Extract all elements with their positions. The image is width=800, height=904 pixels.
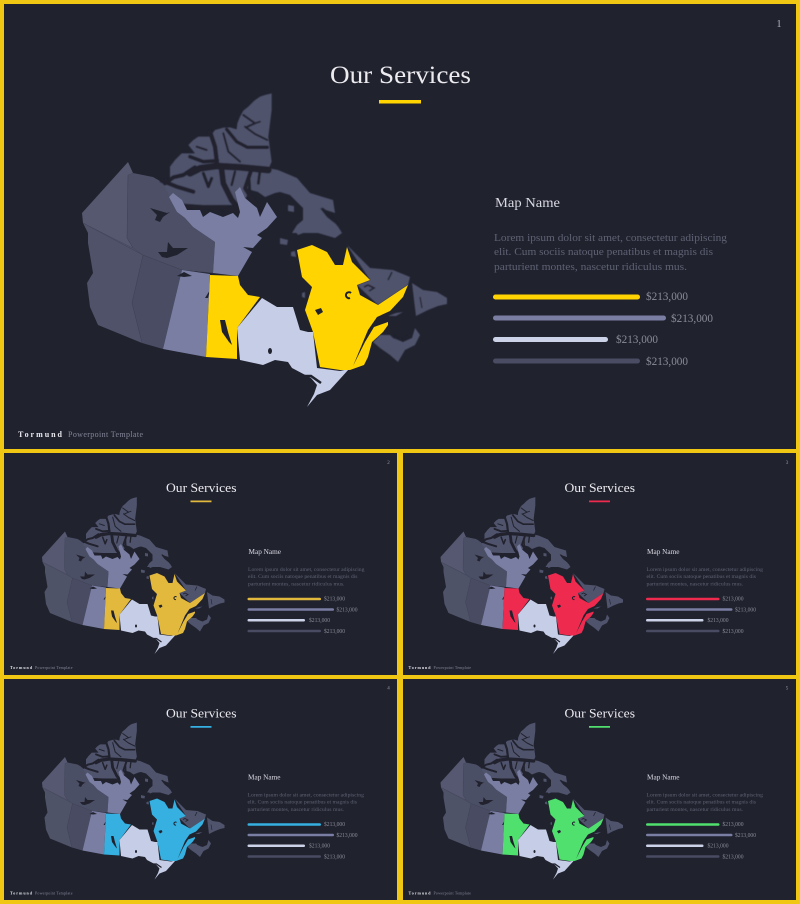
slide 5 contents: Powerpoint Template <box>434 890 471 896</box>
slide 4 contents: elit. Cum sociis natoque penatibus et magnis dis <box>248 800 357 806</box>
slide 2 contents: 2 <box>387 461 390 466</box>
slide 2 contents: $213,000 <box>336 606 358 614</box>
body text <box>494 232 728 273</box>
bar chart <box>493 290 713 368</box>
slide 3 contents: $213,000 <box>722 628 744 635</box>
slide 2 contents: parturient montes, nascetur ridiculus mus. <box>248 582 345 588</box>
slide 4 contents: $213,000 <box>324 854 345 860</box>
title: Our Services <box>330 62 471 89</box>
slide 5 contents: Tormund <box>408 890 431 896</box>
slide 4 contents: Tormund <box>10 890 33 896</box>
body text: elit. Cum sociis natoque penatibus et magnis dis <box>494 246 713 258</box>
slide 3 contents: $213,000 <box>708 617 729 624</box>
slide 4 contents <box>10 686 390 896</box>
slide 3 contents: Map Name <box>647 548 680 556</box>
slide 4 contents: parturient montes, nascetur ridiculus mus. <box>248 807 345 813</box>
footer: Tormund <box>18 430 63 439</box>
slide 2 contents: $213,000 <box>309 617 330 624</box>
bar chart: $213,000 <box>646 290 688 303</box>
bar chart: $213,000 <box>671 312 713 325</box>
panel: slide 2 yellow <box>4 453 397 675</box>
slide 3 contents: elit. Cum sociis natoque penatibus et magnis dis <box>646 574 756 580</box>
title underline <box>379 100 421 104</box>
slide 5 contents: $213,000 <box>722 854 744 860</box>
slide 3 contents: 3 <box>786 461 789 466</box>
panel: slide 5 green <box>403 679 796 900</box>
slide 2 contents: Tormund <box>10 665 33 670</box>
slide 4 contents: Lorem ipsum dolor sit amet, consectetur adipiscing <box>248 792 364 798</box>
slide 3 contents: $213,000 <box>735 606 756 614</box>
slide 2 contents: $213,000 <box>324 628 345 635</box>
slide 3 contents: Lorem ipsum dolor sit amet, consectetur adipiscing <box>646 567 763 573</box>
slide 3 contents: Tormund <box>408 665 431 670</box>
slide 3 contents: Our Services <box>564 481 635 495</box>
slide 2 contents: Our Services <box>166 481 237 495</box>
heading: map name: Map Name <box>495 196 560 211</box>
slide 2 contents: $213,000 <box>324 596 345 602</box>
slide 5 contents: elit. Cum sociis natoque penatibus et magnis dis <box>646 800 756 806</box>
panel: slide 4 blue <box>4 679 397 900</box>
slide 3 contents: Powerpoint Template <box>434 665 471 670</box>
slide 5 contents: $213,000 <box>722 821 744 828</box>
slide 3 contents: parturient montes, nascetur ridiculus mus. <box>646 582 744 588</box>
slide 3 contents <box>408 461 789 670</box>
slide 2 contents: elit. Cum sociis natoque penatibus et magnis dis <box>248 574 358 580</box>
slide 5 contents <box>408 686 789 896</box>
panel: slide 3 red <box>403 453 796 675</box>
slide 2 contents: Lorem ipsum dolor sit amet, consectetur adipiscing <box>248 567 365 573</box>
panel: main slide 1 <box>4 4 796 449</box>
slide 4 contents: $213,000 <box>336 832 358 839</box>
slide 5 contents: Map Name <box>647 774 680 782</box>
slide 5 contents: $213,000 <box>735 832 756 839</box>
body text: parturient montes, nascetur ridiculus mus. <box>494 261 687 273</box>
slide 4 contents: 4 <box>387 686 390 692</box>
slide 5 contents: parturient montes, nascetur ridiculus mus. <box>646 807 744 813</box>
page number 1: 1 <box>776 19 782 30</box>
slide 4 contents: Map Name <box>248 774 280 782</box>
footer <box>18 430 143 439</box>
slide 2 contents: Powerpoint Template <box>35 665 73 670</box>
slide 3 contents: $213,000 <box>722 596 744 602</box>
footer: Powerpoint Template <box>68 430 143 439</box>
slide 4 contents: $213,000 <box>324 821 345 828</box>
slide 4 contents: Our Services <box>166 706 237 720</box>
slide 4 contents: Powerpoint Template <box>35 890 73 896</box>
map of Canada with yellow highlight <box>82 93 447 407</box>
slide 5 contents: Lorem ipsum dolor sit amet, consectetur adipiscing <box>646 792 763 798</box>
slide 2 contents: Map Name <box>248 548 281 556</box>
slide 5 contents: 5 <box>786 686 789 692</box>
slide 5 contents: Our Services <box>564 706 635 720</box>
bar chart: $213,000 <box>616 333 658 346</box>
bar chart: $213,000 <box>646 355 688 368</box>
slide 5 contents: $213,000 <box>708 842 729 850</box>
body text: Lorem ipsum dolor sit amet, consectetur adipiscing <box>494 232 728 244</box>
slide 4 contents: $213,000 <box>309 842 330 850</box>
slide 2 contents <box>10 461 390 670</box>
